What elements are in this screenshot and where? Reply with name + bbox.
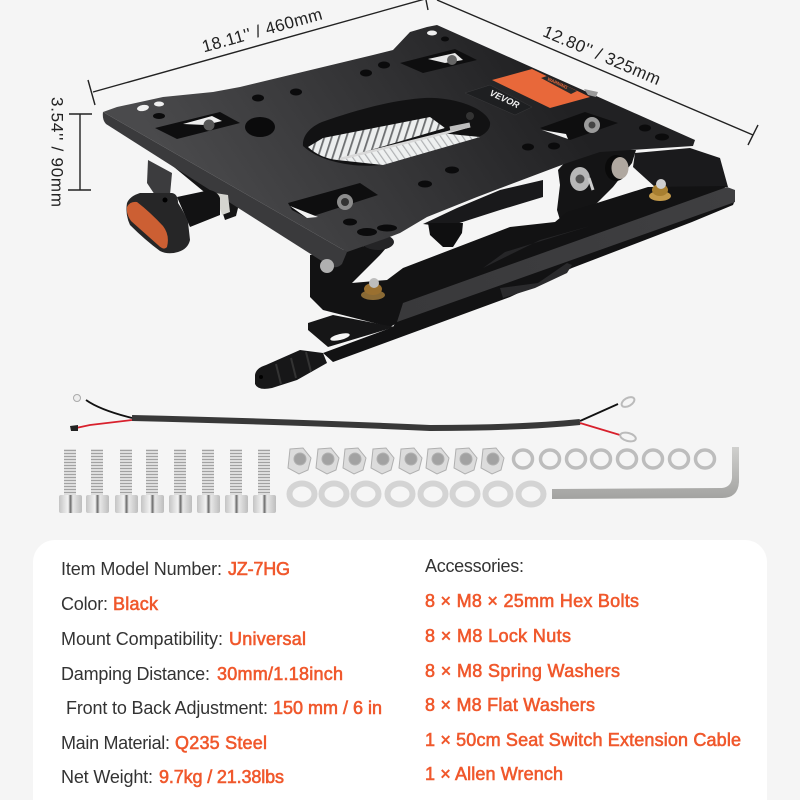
hardware: 8 lock nuts — [288, 448, 504, 474]
left bracket behind knob — [147, 160, 172, 195]
right column: accessories: 1 × Allen Wrench — [425, 764, 563, 784]
adjustment knob — [126, 190, 230, 253]
right column: accessories: 1 × 50cm Seat Switch Extension Cable — [425, 730, 741, 750]
right column: accessories: Accessories: — [425, 556, 524, 576]
left column: specifications: Net Weight: — [61, 767, 153, 787]
specification panel — [33, 540, 767, 800]
hardware: 8 hex bolts — [59, 449, 276, 513]
lower mounting plate — [308, 315, 395, 347]
rail underside and release rod — [323, 200, 735, 362]
oval window with spring — [303, 98, 490, 166]
left column: specifications: JZ-7HG — [228, 559, 290, 579]
dimension: height 3.54 in / 90 mm — [48, 97, 92, 207]
left column: specifications: Q235 Steel — [175, 733, 267, 753]
left column: specifications: Front to Back Adjustment: — [66, 698, 268, 718]
VEVOR label — [465, 85, 532, 115]
left column: specifications — [61, 559, 382, 787]
hardware: Allen wrench — [552, 447, 739, 499]
rear bracket — [557, 150, 636, 220]
orange warning sticker: WARNING — [547, 76, 569, 90]
product: seat suspension slider — [103, 25, 735, 389]
top plate — [103, 25, 695, 252]
left column: specifications: Color: — [61, 594, 108, 614]
corner slot highlights — [137, 30, 437, 112]
dimension: depth 12.80 in / 325 mm: 12.80'' / 325mm — [540, 22, 663, 89]
right column: accessories — [425, 556, 741, 784]
plate holes — [153, 36, 669, 236]
VEVOR label: VEVOR — [488, 88, 521, 110]
right column: accessories: 8 × M8 Lock Nuts — [425, 626, 571, 646]
rear bumper under plate — [362, 234, 394, 250]
bracket under plate — [163, 158, 240, 220]
left column: specifications: Main Material: — [61, 733, 170, 753]
dimension: width 18.11 in / 460 mm: 18.11'' / 460mm — [200, 5, 324, 56]
left column: specifications: Universal — [229, 629, 306, 649]
left column: specifications: Damping Distance: — [61, 664, 210, 684]
dimension: height 3.54 in / 90 mm: 3.54'' / 90mm — [48, 97, 67, 207]
release grip — [255, 350, 327, 389]
rear tray — [633, 148, 728, 187]
scissor arm — [310, 186, 727, 327]
grey rail front — [397, 187, 735, 322]
slide band under plate — [423, 180, 543, 227]
hardware: extension cable — [70, 394, 637, 443]
plate front thick edge — [103, 112, 347, 267]
left column: specifications: 150 mm / 6 in — [273, 698, 382, 718]
left column: specifications: Mount Compatibility: — [61, 629, 223, 649]
left column: specifications: Black — [113, 594, 159, 614]
release latch — [500, 263, 572, 298]
left column: specifications: Item Model Number: — [61, 559, 222, 579]
dimension: width 18.11 in / 460 mm — [88, 0, 425, 105]
dimension: depth 12.80 in / 325 mm — [426, 0, 758, 145]
left column: specifications: 9.7kg / 21.38lbs — [159, 767, 284, 787]
foot under plate — [428, 223, 463, 247]
right column: accessories: 8 × M8 × 25mm Hex Bolts — [425, 591, 639, 611]
right column: accessories: 8 × M8 Flat Washers — [425, 695, 595, 715]
right column: accessories: 8 × M8 Spring Washers — [425, 661, 620, 681]
hardware: 8 spring washers — [514, 450, 714, 468]
orange warning sticker — [492, 69, 590, 108]
mounting slots — [155, 49, 618, 218]
left column: specifications: 30mm/1.18inch — [217, 664, 343, 684]
hardware: 8 flat washers — [290, 484, 544, 504]
hardware: bolts on plate and arm — [320, 89, 671, 300]
